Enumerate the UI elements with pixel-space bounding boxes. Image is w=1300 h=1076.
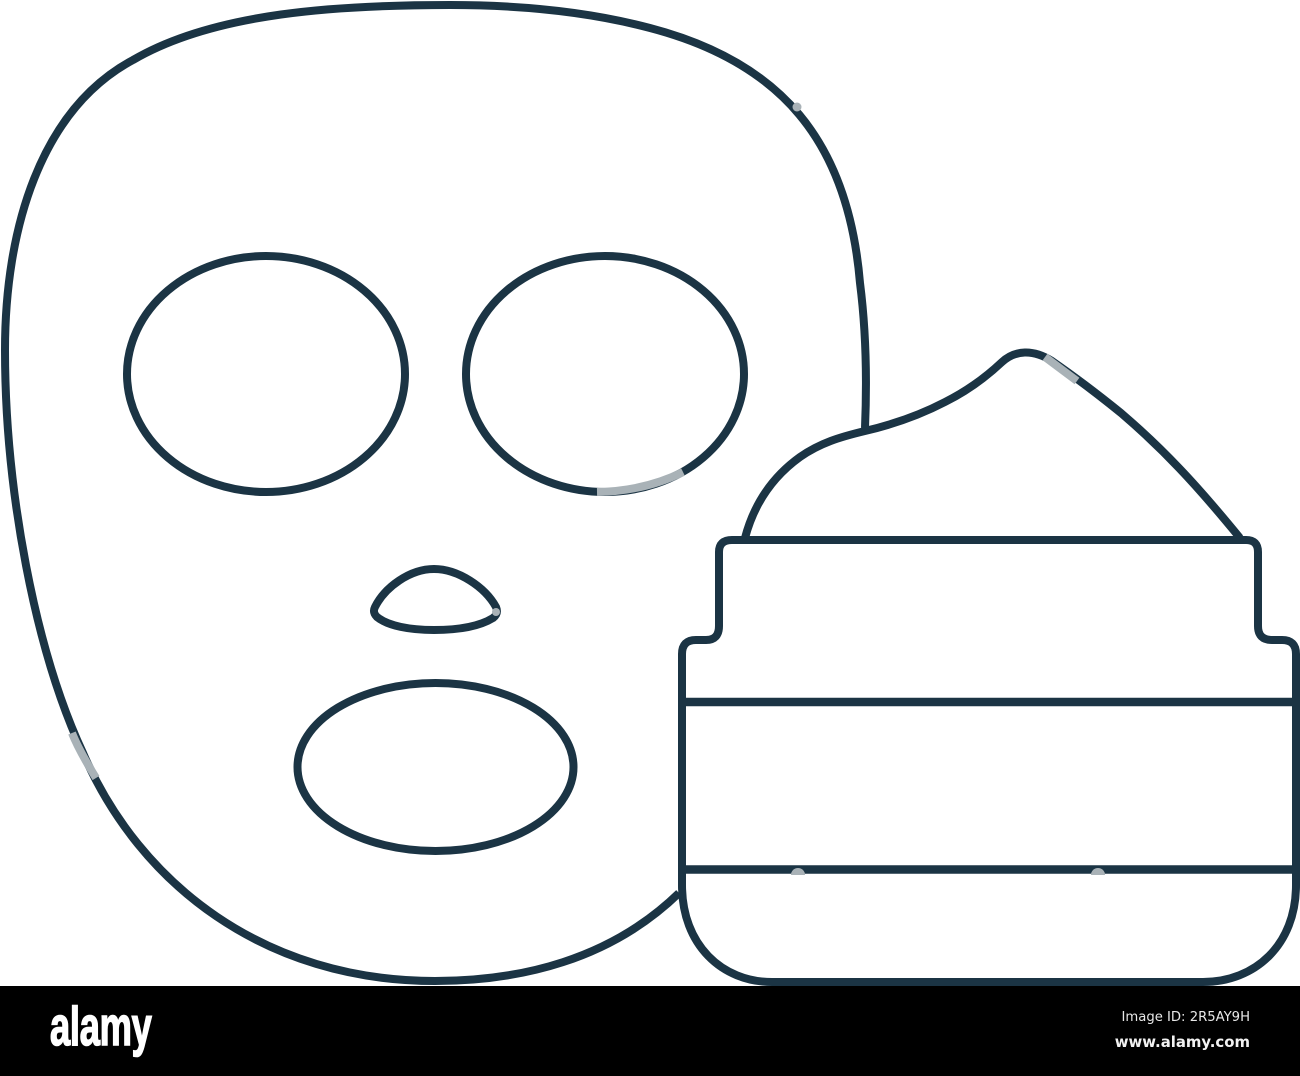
- face mask outline: [5, 5, 866, 981]
- nose hole: [374, 569, 497, 630]
- footer bar: [0, 986, 1300, 1076]
- watermark traces: [72, 102, 1105, 875]
- cream swirl: [745, 352, 1240, 538]
- right eye hole: [466, 256, 744, 492]
- cream jar: [682, 540, 1296, 982]
- footer logo: alamy: [50, 995, 152, 1057]
- image id: Image ID: 2R5AY9H: [1122, 1010, 1250, 1025]
- mouth hole: [298, 683, 574, 851]
- left eye hole: [127, 256, 405, 492]
- stock url: www.alamy.com: [1115, 1033, 1250, 1051]
